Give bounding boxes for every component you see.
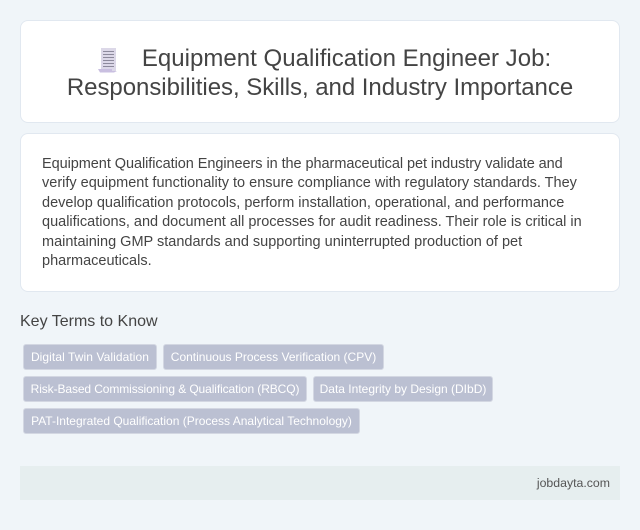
- tag: [163, 344, 384, 370]
- panel: title card: [20, 20, 620, 123]
- tag: Data Integrity by Design (DIbD): [320, 382, 486, 396]
- description text: [42, 156, 582, 269]
- tag: Continuous Process Verification (CPV): [171, 350, 376, 364]
- footer source: jobdayta.com: [537, 476, 610, 490]
- description text: pharmaceuticals.: [42, 253, 152, 269]
- title: Responsibilities, Skills, and Industry Importance: [67, 74, 573, 101]
- tag: [23, 376, 307, 402]
- footer: [20, 466, 620, 500]
- tag: Risk-Based Commissioning & Qualification (RBCQ): [31, 382, 299, 396]
- tag: [23, 344, 157, 370]
- tag: [313, 376, 493, 402]
- tag: Digital Twin Validation: [31, 350, 149, 364]
- heading: key terms: Key Terms to Know: [20, 313, 158, 330]
- description text: verify equipment functionality to ensure compliance with regulatory standards. They: [42, 175, 577, 191]
- tag: [23, 408, 360, 434]
- tag: PAT-Integrated Qualification (Process Analytical Technology): [31, 414, 352, 428]
- description text: maintaining GMP standards and supporting uninterrupted production of pet: [42, 234, 522, 250]
- panel: description: [20, 133, 620, 292]
- description text: develop qualification protocols, perform installation, operational, and performance: [42, 194, 564, 210]
- icon: document: [98, 48, 117, 72]
- description text: Equipment Qualification Engineers in the pharmaceutical pet industry validate and: [42, 156, 563, 172]
- panel: key term tags: [23, 344, 493, 434]
- title: Equipment Qualification Engineer Job:: [142, 45, 551, 72]
- description text: qualifications, and document all processes for audit readiness. Their role is critical in: [42, 214, 582, 230]
- title: [67, 45, 573, 101]
